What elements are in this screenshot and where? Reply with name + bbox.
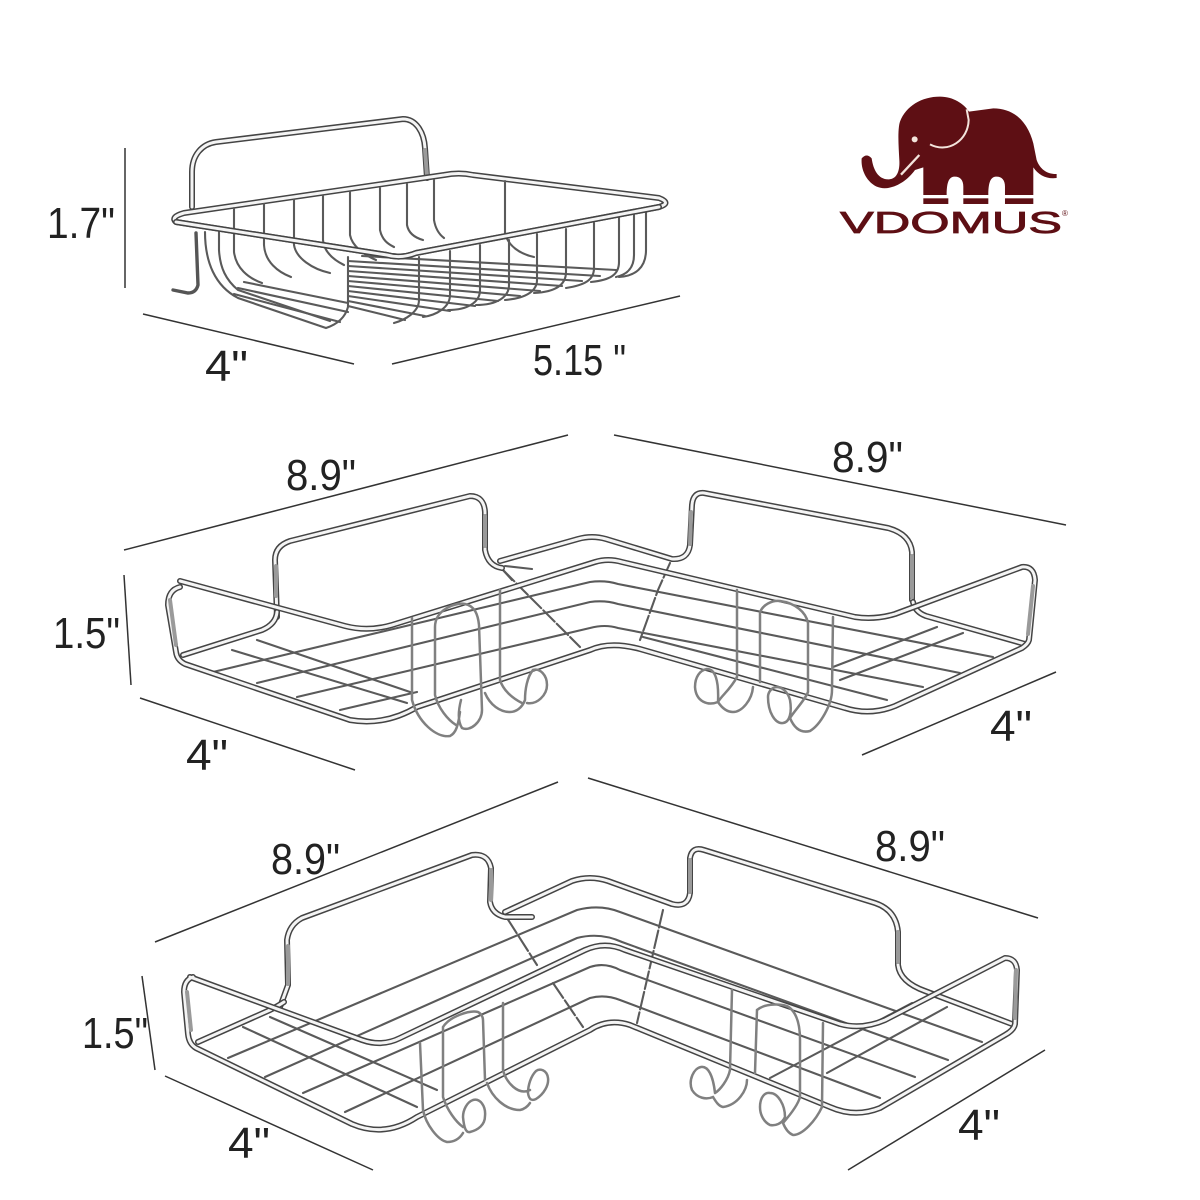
hooks right: [695, 590, 833, 732]
shelf rim tube: [168, 560, 1035, 721]
logo: VDOMUS elephant: [840, 97, 1068, 240]
shelf back wall tubes: [198, 849, 1012, 1042]
shelf wires: [228, 907, 982, 1112]
panel: bottom corner shelf with dimensions: [82, 778, 1045, 1170]
basket wire ribs and floor: [205, 180, 646, 328]
hooks left: [412, 590, 547, 736]
elephant body: [862, 97, 1057, 204]
shelf back wall tubes: [183, 493, 1025, 655]
shelf shaded uprights: [187, 860, 1016, 1030]
shelf wires: [213, 563, 993, 710]
dimension line: depth right: [862, 672, 1056, 755]
label: 1.7 inch: 1.7": [47, 199, 115, 248]
label: 8.9 inch left: 8.9": [271, 835, 340, 884]
label: 4 inch: 4": [205, 342, 248, 391]
basket handle tube: [192, 119, 427, 207]
label: 4 inch left: 4": [228, 1119, 270, 1168]
brand wordmark: VDOMUS: [840, 205, 1062, 240]
dimension line: depth left: [140, 698, 355, 770]
registered mark: ®: [1062, 209, 1068, 218]
label: 1.5 inch: 1.5": [82, 1009, 148, 1058]
panel: top small basket with dimensions: [47, 119, 680, 391]
dimension line: height: [124, 148, 126, 288]
shelf rim tube: [184, 946, 1017, 1130]
dimension line: top right: [614, 435, 1066, 525]
label: 8.9 inch left: 8.9": [286, 451, 356, 500]
dimension line: top left: [124, 435, 568, 550]
dimension line: top left: [155, 782, 558, 942]
dimension line: width: [392, 296, 680, 364]
dimension line: top right: [588, 778, 1038, 918]
dimension line: height: [142, 976, 155, 1070]
hooks left: [420, 1003, 548, 1142]
label: 8.9 inch right: 8.9": [875, 822, 945, 871]
dimension line: height: [124, 575, 131, 685]
dimension line: depth right: [848, 1050, 1045, 1170]
label: 4 inch right: 4": [990, 702, 1032, 751]
label: 1.5 inch: 1.5": [53, 609, 120, 658]
panel: middle corner shelf with dimensions: [53, 433, 1066, 780]
label: 4 inch left: 4": [186, 731, 228, 780]
dimension line: depth: [143, 314, 354, 364]
basket rim tube: [174, 174, 665, 257]
basket foot hook: [173, 233, 198, 293]
dimension line: depth left: [165, 1076, 373, 1170]
shelf shaded uprights: [170, 512, 1033, 645]
basket front rim tube: [176, 207, 659, 257]
label: 4 inch right: 4": [958, 1101, 1000, 1150]
label: 8.9 inch right: 8.9": [832, 433, 903, 482]
hooks right: [691, 990, 823, 1135]
label: 5.15 inch: 5.15 ": [533, 336, 626, 385]
